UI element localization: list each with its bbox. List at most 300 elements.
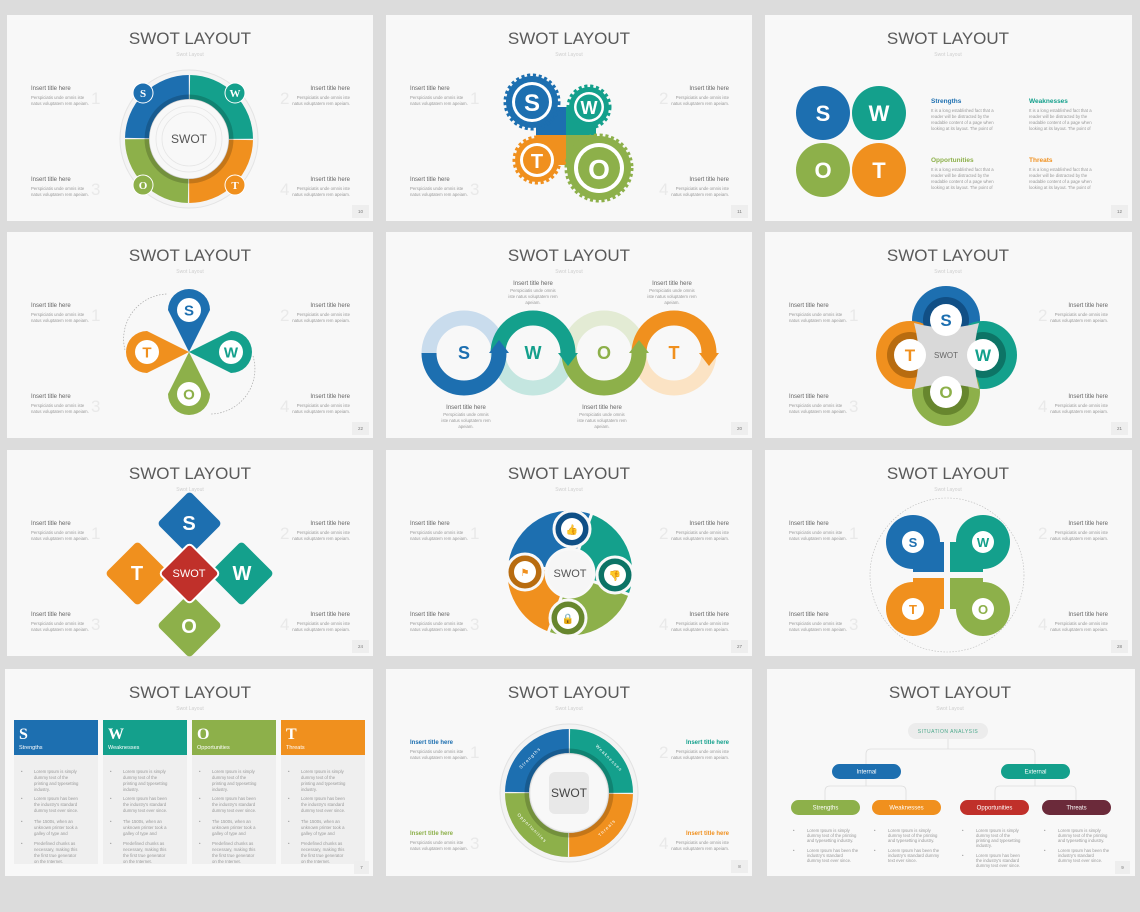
title: SWOT LAYOUT: [887, 29, 1009, 48]
bullet texts: and typesetting industry.: [807, 838, 853, 843]
page number: [352, 205, 369, 218]
subtitle: Swot Layout: [176, 52, 204, 58]
top text T: iste natus voluptatem rem: [647, 294, 697, 299]
column O: printing and typesetting: [212, 781, 257, 786]
circles: S: [816, 101, 830, 126]
column S: Strengths: [19, 745, 43, 751]
text block 3: Perspiciatis unde omnis iste: [31, 403, 85, 408]
column O: •: [199, 769, 201, 774]
opportunities text: reader will be distracted by the: [931, 173, 990, 178]
text block 1: Insert title here: [31, 521, 71, 527]
text block 3: Insert title here: [31, 612, 71, 618]
text block 3: Perspiciatis unde omnis iste: [410, 621, 464, 626]
bullet texts: Lorem Ipsum has been the: [1058, 848, 1110, 853]
text block 3: Perspiciatis unde omnis iste: [410, 186, 464, 191]
column O: •: [199, 819, 201, 824]
column T: the industry's standard: [301, 802, 345, 807]
bottom text O: [577, 405, 627, 429]
column S: on the Internet.: [34, 859, 63, 864]
threats text: readable content of a page when: [1029, 179, 1092, 184]
text block 3: [31, 177, 100, 199]
bullet texts: Lorem Ipsum is simply: [1058, 828, 1102, 833]
text block 4: Perspiciatis unde omnis iste: [297, 186, 351, 191]
column T: Lorem Ipsum is simply: [301, 769, 345, 774]
text block 4: 4: [280, 180, 289, 199]
text block 2: Insert title here: [686, 740, 730, 746]
text block 4: Insert title here: [310, 612, 351, 618]
flower diagram: W: [975, 346, 992, 365]
text block 2: Perspiciatis unde omnis iste: [676, 749, 730, 754]
diamond diagram: [105, 491, 274, 658]
column S: S: [19, 726, 28, 743]
column O: dummy text ever since.: [212, 808, 256, 813]
page number: 9: [1121, 865, 1124, 870]
gears diagram: O: [588, 154, 610, 185]
text block 2: Perspiciatis unde omnis iste: [676, 95, 730, 100]
strengths text: Strengths: [931, 98, 962, 105]
bullet texts: dummy text ever since.: [1058, 858, 1102, 863]
strengths text: reader will be distracted by the: [931, 114, 990, 119]
column O: Predefined chunks as: [212, 841, 253, 846]
column S: The 1500s, when an: [34, 819, 74, 824]
column S: necessary, making this: [34, 847, 77, 852]
slide 5: wave arrows: [386, 232, 752, 438]
text block 2: Perspiciatis unde omnis iste: [1055, 312, 1109, 317]
subtitle: Swot Layout: [555, 706, 583, 712]
text block 4: Perspiciatis unde omnis iste: [676, 186, 730, 191]
bottom text S: Insert title here: [446, 405, 487, 411]
subtitle: Swot Layout: [934, 269, 962, 275]
text block 2: Perspiciatis unde omnis iste: [676, 530, 730, 535]
column O: on the Internet.: [212, 859, 241, 864]
text block 2: Perspiciatis unde omnis iste: [1055, 530, 1109, 535]
bullet texts: Lorem Ipsum is simply: [888, 828, 932, 833]
text block 1: natus voluptatem rem apeiam.: [31, 101, 89, 106]
letter badges: O: [139, 180, 148, 192]
column S: [14, 720, 98, 864]
bullet texts: the industry's standard: [976, 858, 1020, 863]
text block 4: Perspiciatis unde omnis iste: [676, 840, 730, 845]
page number: [1115, 861, 1130, 874]
page number: [1111, 640, 1128, 653]
text block 1: natus voluptatem rem apeiam.: [410, 101, 468, 106]
text block 2: natus voluptatem rem apeiam.: [1050, 536, 1108, 541]
strengths text: [931, 98, 994, 131]
text block 4: [280, 177, 351, 199]
icons: ⚑: [521, 568, 529, 579]
text block 1: 1: [470, 743, 479, 762]
subtitle: Swot Layout: [176, 487, 204, 493]
page number: [731, 422, 748, 435]
text block 4: Insert title here: [310, 394, 351, 400]
column T: •: [288, 819, 290, 824]
text block 4: Insert title here: [1068, 394, 1109, 400]
column T: Lorem Ipsum has been: [301, 796, 346, 801]
text block 3: 3: [470, 834, 479, 853]
column T: Threats: [286, 745, 305, 751]
text block 1: Perspiciatis unde omnis iste: [410, 95, 464, 100]
text block 1: 1: [470, 89, 479, 108]
column S: •: [21, 841, 23, 846]
ring diagram: Threats: [597, 818, 617, 838]
text block 3: 3: [470, 615, 479, 634]
text block 2: natus voluptatem rem apeiam.: [292, 318, 350, 323]
text block 1: [31, 86, 100, 108]
page number: 8: [738, 864, 741, 869]
clover diagram: [870, 498, 1024, 652]
text block 3: Insert title here: [410, 612, 450, 618]
weaknesses pill: [872, 800, 941, 815]
column T: necessary, making this: [301, 847, 344, 852]
diamond diagram: W: [233, 563, 252, 585]
column O: unknown printer took a: [212, 825, 256, 830]
bullet texts: Lorem Ipsum is simply: [807, 828, 851, 833]
bullet texts: dummy text of the: [976, 833, 1011, 838]
text block 2: [659, 521, 730, 543]
bottom text O: apeiam.: [594, 424, 610, 429]
page number: [731, 640, 748, 653]
ring diagram: SWOT: [551, 786, 588, 800]
text block 2: 2: [659, 524, 668, 543]
text block 2: 2: [1038, 524, 1047, 543]
column O: •: [199, 841, 201, 846]
bullet texts: Lorem Ipsum has been the: [807, 848, 859, 853]
column O: the industry's standard: [212, 802, 256, 807]
threats text: reader will be distracted by the: [1029, 173, 1088, 178]
icons: 👎: [609, 570, 621, 582]
text block 1: Perspiciatis unde omnis iste: [31, 312, 85, 317]
slide 10: columns: [5, 669, 373, 876]
top text T: apeiam.: [664, 300, 680, 305]
column O: necessary, making this: [212, 847, 255, 852]
column S: •: [21, 796, 23, 801]
bullet texts: •: [1044, 828, 1046, 833]
column O: galley of type and: [212, 831, 246, 836]
text block 1: natus voluptatem rem apeiam.: [789, 318, 847, 323]
text block 2: natus voluptatem rem apeiam.: [1050, 318, 1108, 323]
column T: •: [288, 769, 290, 774]
top text W: Perspiciatis unde omnis: [510, 288, 556, 293]
text block 4: Insert title here: [689, 177, 730, 183]
bullet texts: •: [793, 848, 795, 853]
text block 3: [410, 831, 479, 853]
column S: galley of type and: [34, 831, 68, 836]
text block 4: 4: [280, 397, 289, 416]
column T: printing and typesetting: [301, 781, 346, 786]
title: SWOT LAYOUT: [508, 464, 630, 483]
column W: the industry's standard: [123, 802, 167, 807]
title: SWOT LAYOUT: [508, 683, 630, 702]
external pill: External: [1024, 770, 1047, 776]
text block 4: 4: [1038, 397, 1047, 416]
weaknesses text: readable content of a page when: [1029, 120, 1092, 125]
icons: 👍: [566, 523, 578, 536]
column S: industry.: [34, 787, 50, 792]
weaknesses text: It is a long established fact that a: [1029, 108, 1092, 113]
column S: •: [21, 819, 23, 824]
text block 2: Insert title here: [310, 86, 351, 92]
column W: •: [110, 841, 112, 846]
bullet texts: industry.: [976, 843, 992, 848]
text block 1: Insert title here: [789, 303, 829, 309]
text block 4: [659, 612, 730, 634]
bullet texts: •: [1044, 848, 1046, 853]
text block 4: natus voluptatem rem apeiam.: [671, 192, 729, 197]
connectors: [825, 739, 1076, 800]
arrow circles: [429, 318, 709, 388]
text block 1: natus voluptatem rem apeiam.: [31, 318, 89, 323]
page number: [1111, 205, 1128, 218]
page number: 7: [360, 865, 363, 870]
flower diagram: T: [905, 346, 916, 365]
letters: S: [458, 343, 470, 363]
text block 1: 1: [91, 524, 100, 543]
ring diagram: SWOT: [171, 132, 208, 146]
text block 3: 3: [91, 180, 100, 199]
column W: •: [110, 769, 112, 774]
column T: galley of type and: [301, 831, 335, 836]
ring diagram: [500, 724, 638, 862]
threats text: Threats: [1029, 157, 1053, 164]
pin diagram: O: [183, 386, 195, 404]
column W: •: [110, 796, 112, 801]
bottom text S: iste natus voluptatem rem: [441, 418, 491, 423]
column O: Lorem Ipsum is simply: [212, 769, 256, 774]
gears diagram: S: [524, 90, 540, 117]
situation analysis pill: SITUATION ANALYSIS: [918, 729, 978, 735]
column S: Lorem Ipsum is simply: [34, 769, 78, 774]
ring diagram: Strengths: [518, 746, 542, 770]
subtitle: Swot Layout: [555, 487, 583, 493]
flower diagram: O: [939, 383, 953, 402]
internal pill: [832, 764, 901, 779]
top text W: iste natus voluptatem rem: [508, 294, 558, 299]
text block 2: Insert title here: [310, 521, 351, 527]
opportunities text: Opportunities: [931, 157, 974, 164]
title: SWOT LAYOUT: [887, 464, 1009, 483]
text block 1: 1: [470, 524, 479, 543]
page number: 27: [737, 644, 742, 649]
text block 2: Insert title here: [310, 303, 351, 309]
text block 1: [789, 303, 858, 325]
text block 1: natus voluptatem rem apeiam.: [789, 536, 847, 541]
text block 1: Insert title here: [789, 521, 829, 527]
diamond diagram: O: [181, 616, 197, 638]
slide 11: ring with labels: [386, 669, 752, 876]
text block 4: Perspiciatis unde omnis iste: [676, 621, 730, 626]
title: SWOT LAYOUT: [508, 246, 630, 265]
text block 1: Perspiciatis unde omnis iste: [410, 530, 464, 535]
text block 1: Perspiciatis unde omnis iste: [410, 749, 464, 754]
text block 4: natus voluptatem rem apeiam.: [671, 627, 729, 632]
title: SWOT LAYOUT: [887, 246, 1009, 265]
strengths pill: Strengths: [813, 806, 838, 812]
text block 3: Insert title here: [410, 831, 454, 837]
icons: 🔒: [562, 613, 574, 625]
bullet texts: dummy text ever since.: [976, 863, 1020, 868]
text block 1: Insert title here: [31, 86, 71, 92]
opportunities text: readable content of a page when: [931, 179, 994, 184]
text block 1: natus voluptatem rem apeiam.: [410, 536, 468, 541]
page number: 10: [358, 209, 363, 214]
text block 4: Perspiciatis unde omnis iste: [1055, 621, 1109, 626]
top text W: apeiam.: [525, 300, 541, 305]
gears diagram: W: [580, 98, 598, 118]
text block 3: natus voluptatem rem apeiam.: [410, 192, 468, 197]
bottom text O: iste natus voluptatem rem: [577, 418, 627, 423]
strengths text: It is a long established fact that a: [931, 108, 994, 113]
text block 3: natus voluptatem rem apeiam.: [410, 846, 468, 851]
text block 3: Insert title here: [410, 177, 450, 183]
text block 2: 2: [659, 743, 668, 762]
text block 4: 4: [659, 615, 668, 634]
text block 3: Insert title here: [31, 394, 71, 400]
text block 1: natus voluptatem rem apeiam.: [31, 536, 89, 541]
letters: T: [668, 343, 680, 363]
text block 2: 2: [280, 306, 289, 325]
title: SWOT LAYOUT: [129, 29, 251, 48]
bullet texts: •: [874, 828, 876, 833]
text block 2: 2: [659, 89, 668, 108]
page number: [731, 205, 748, 218]
column S: dummy text ever since.: [34, 808, 78, 813]
text block 4: 4: [1038, 615, 1047, 634]
text block 2: Insert title here: [1068, 303, 1109, 309]
column T: the first true generator: [301, 853, 344, 858]
column T: T: [286, 726, 297, 743]
threats pill: [1042, 800, 1111, 815]
weaknesses text: Weaknesses: [1029, 98, 1068, 105]
text block 3: [31, 394, 100, 416]
column T: unknown printer took a: [301, 825, 345, 830]
subtitle: Swot Layout: [555, 269, 583, 275]
icons: [514, 518, 626, 629]
column O: the first true generator: [212, 853, 255, 858]
column W: galley of type and: [123, 831, 157, 836]
column W: dummy text ever since.: [123, 808, 167, 813]
bottom text S: Perspiciatis unde omnis: [443, 412, 489, 417]
letter badges: [133, 83, 245, 195]
text block 4: Insert title here: [1068, 612, 1109, 618]
subtitle: Swot Layout: [176, 269, 204, 275]
slide 4: pins: [7, 232, 373, 438]
text block 2: Insert title here: [689, 521, 730, 527]
text block 3: 3: [91, 397, 100, 416]
slide 7: diamonds: [7, 450, 373, 658]
text block 2: [280, 303, 351, 325]
text block 4: natus voluptatem rem apeiam.: [671, 846, 729, 851]
text block 3: Perspiciatis unde omnis iste: [789, 621, 843, 626]
text block 1: natus voluptatem rem apeiam.: [410, 755, 468, 760]
weaknesses pill: Weaknesses: [889, 806, 924, 812]
flower diagram: [876, 286, 1017, 426]
text block 4: [280, 612, 351, 634]
slide 8: pinwheel: [386, 450, 752, 656]
bullet texts: text ever since.: [888, 858, 917, 863]
subtitle: Swot Layout: [934, 52, 962, 58]
text block 4: [659, 831, 730, 853]
clover diagram: O: [978, 602, 988, 617]
clover diagram: S: [909, 535, 918, 550]
clover diagram: T: [909, 602, 917, 617]
text block 3: natus voluptatem rem apeiam.: [789, 627, 847, 632]
top text W: [508, 281, 558, 305]
subtitle: Swot Layout: [936, 706, 964, 712]
text block 1: [31, 303, 100, 325]
text block 1: 1: [91, 306, 100, 325]
bottom text O: Insert title here: [582, 405, 623, 411]
column W: Predefined chunks as: [123, 841, 164, 846]
title: SWOT LAYOUT: [508, 29, 630, 48]
external pill: [1001, 764, 1070, 779]
diamond diagram: S: [182, 513, 196, 535]
diamond diagram: T: [131, 563, 143, 585]
subtitle: Swot Layout: [934, 487, 962, 493]
text block 1: Insert title here: [410, 86, 450, 92]
text block 4: Insert title here: [689, 612, 730, 618]
bullet texts: dummy text of the printing: [888, 833, 938, 838]
text block 4: [659, 177, 730, 199]
gears diagram: [506, 76, 631, 200]
page number: 21: [1117, 426, 1122, 431]
slide 9: clover: [765, 450, 1132, 656]
column W: the first true generator: [123, 853, 166, 858]
flower diagram: S: [940, 311, 952, 330]
bottom text S: apeiam.: [458, 424, 474, 429]
bullet texts: industry's standard: [807, 853, 844, 858]
column W: dummy text of the: [123, 775, 158, 780]
text block 4: Perspiciatis unde omnis iste: [297, 403, 351, 408]
page number: [731, 860, 748, 873]
threats text: looking at its layout. The point of: [1029, 185, 1091, 190]
text block 3: [410, 612, 479, 634]
text block 4: natus voluptatem rem apeiam.: [292, 192, 350, 197]
text block 3: [410, 177, 479, 199]
page number: 24: [358, 644, 363, 649]
text block 1: [410, 86, 479, 108]
column S: printing and typesetting: [34, 781, 79, 786]
bullet texts: dummy text of the printing: [1058, 833, 1108, 838]
column W: W: [108, 726, 124, 743]
weaknesses text: reader will be distracted by the: [1029, 114, 1088, 119]
text block 4: Perspiciatis unde omnis iste: [297, 621, 351, 626]
column T: on the Internet.: [301, 859, 330, 864]
column O: [192, 720, 276, 864]
bullet texts: printing and typesetting: [976, 838, 1021, 843]
text block 2: Insert title here: [1068, 521, 1109, 527]
text block 3: natus voluptatem rem apeiam.: [31, 627, 89, 632]
gears diagram: T: [531, 151, 543, 173]
circles: W: [869, 101, 890, 126]
top text T: Insert title here: [652, 281, 693, 287]
page number: 28: [1117, 644, 1122, 649]
pin diagram: [124, 289, 255, 415]
column W: unknown printer took a: [123, 825, 167, 830]
bottom text S: [441, 405, 491, 429]
circles: T: [872, 158, 886, 183]
bullet texts: •: [874, 848, 876, 853]
slide 12: situation analysis tree: [767, 669, 1135, 876]
letter badges: S: [140, 88, 146, 100]
text block 4: natus voluptatem rem apeiam.: [1050, 627, 1108, 632]
text block 1: [789, 521, 858, 543]
letters: W: [524, 343, 542, 363]
title: SWOT LAYOUT: [129, 683, 251, 702]
page number: [354, 861, 369, 874]
text block 2: natus voluptatem rem apeiam.: [671, 101, 729, 106]
text block 2: [659, 740, 730, 762]
text block 1: Perspiciatis unde omnis iste: [789, 530, 843, 535]
